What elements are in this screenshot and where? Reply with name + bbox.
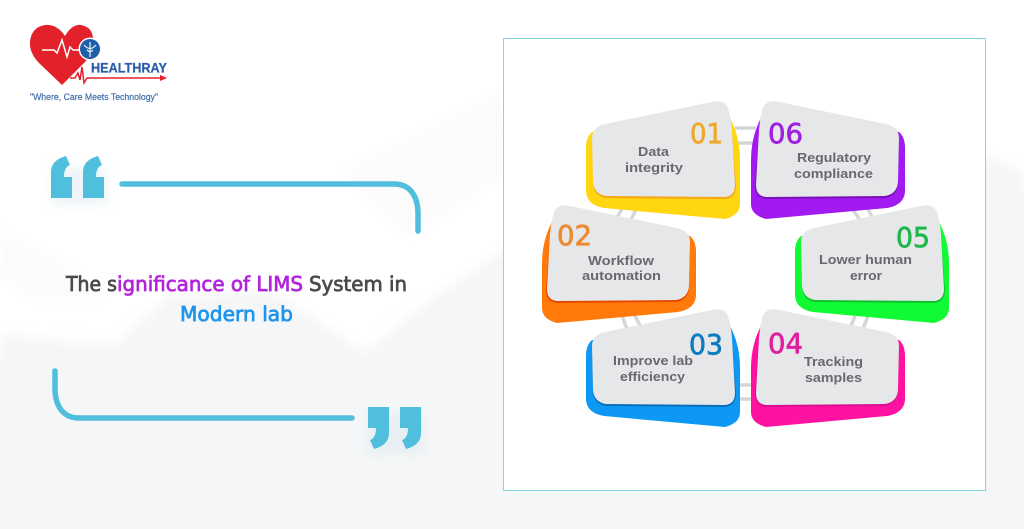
bottom bracket line [55, 371, 352, 418]
card 06: Regulatory [797, 150, 872, 165]
card 03 [586, 309, 740, 427]
logo wordmark: HEALTHRAY [91, 60, 167, 76]
card 06: 06 [768, 118, 803, 150]
card 05: error [850, 268, 882, 283]
icon: caduceus circle [78, 38, 102, 60]
card 03: efficiency [620, 369, 686, 384]
card 02 [542, 205, 696, 323]
card 02: automation [582, 268, 661, 283]
card 01 [586, 101, 740, 219]
card 05 [795, 205, 949, 323]
card 01: integrity [625, 160, 684, 175]
card 01: 01 [690, 118, 723, 150]
card 04: 04 [768, 328, 803, 360]
logo [30, 25, 167, 102]
soft shadows under quote shapes [52, 168, 424, 454]
card 05: 05 [896, 222, 930, 254]
card 03: Improve lab [613, 353, 693, 368]
card 06 [751, 101, 905, 219]
heading: Modern lab [180, 302, 293, 326]
card 03: 03 [689, 329, 723, 361]
card 04: samples [805, 370, 862, 385]
card 05: Lower human [819, 252, 912, 267]
top bracket line [122, 184, 418, 231]
card 01: Data [638, 144, 670, 159]
card 06: compliance [794, 166, 873, 181]
connectors between cards [616, 128, 873, 399]
opening quote mark [51, 156, 104, 198]
heading: ignificance of LIMS [117, 272, 303, 296]
heading: System in [309, 272, 407, 296]
logo tagline: "Where, Care Meets Technology" [30, 92, 158, 102]
closing quote mark [368, 407, 421, 449]
panel: LIMS benefits frame [504, 38, 986, 490]
icon: heartbeat line on heart [42, 40, 82, 57]
heading: The s [65, 272, 117, 296]
heading [65, 272, 407, 326]
icon: pulse arrow [70, 67, 167, 83]
card 04 [751, 309, 905, 427]
icon: heart [30, 25, 93, 85]
card 04: Tracking [804, 354, 863, 369]
card 02: 02 [557, 220, 592, 252]
card 02: Workflow [588, 253, 655, 268]
